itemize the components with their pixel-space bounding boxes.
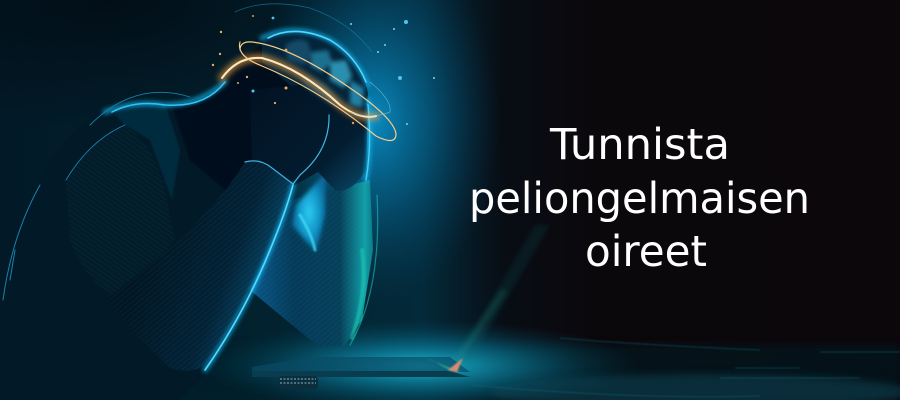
poker chips [278,376,318,389]
upper arm weave [66,125,175,295]
arm behind [250,180,373,346]
laptop [252,357,470,377]
title: Tunnista [549,121,730,170]
hands [250,85,368,200]
front arm [100,161,293,371]
front arm weave [100,161,293,371]
rim light lines [3,31,378,370]
figure [0,30,378,400]
rim light glow [105,30,370,370]
laptop screen reflection [455,225,550,362]
neck and head shadow [172,32,330,190]
shoulder [115,103,180,200]
glow in gap between arms [292,172,326,252]
hair [262,34,368,130]
torso [0,62,262,400]
sparkles [212,15,435,125]
back arm weave [250,180,373,346]
title line 2: peliongelmaisen [469,175,810,224]
floor glow [0,320,900,400]
upper arm [66,125,175,295]
fingers [285,40,364,108]
title line 3: oireet [585,228,707,277]
gold halo rings [222,4,396,141]
